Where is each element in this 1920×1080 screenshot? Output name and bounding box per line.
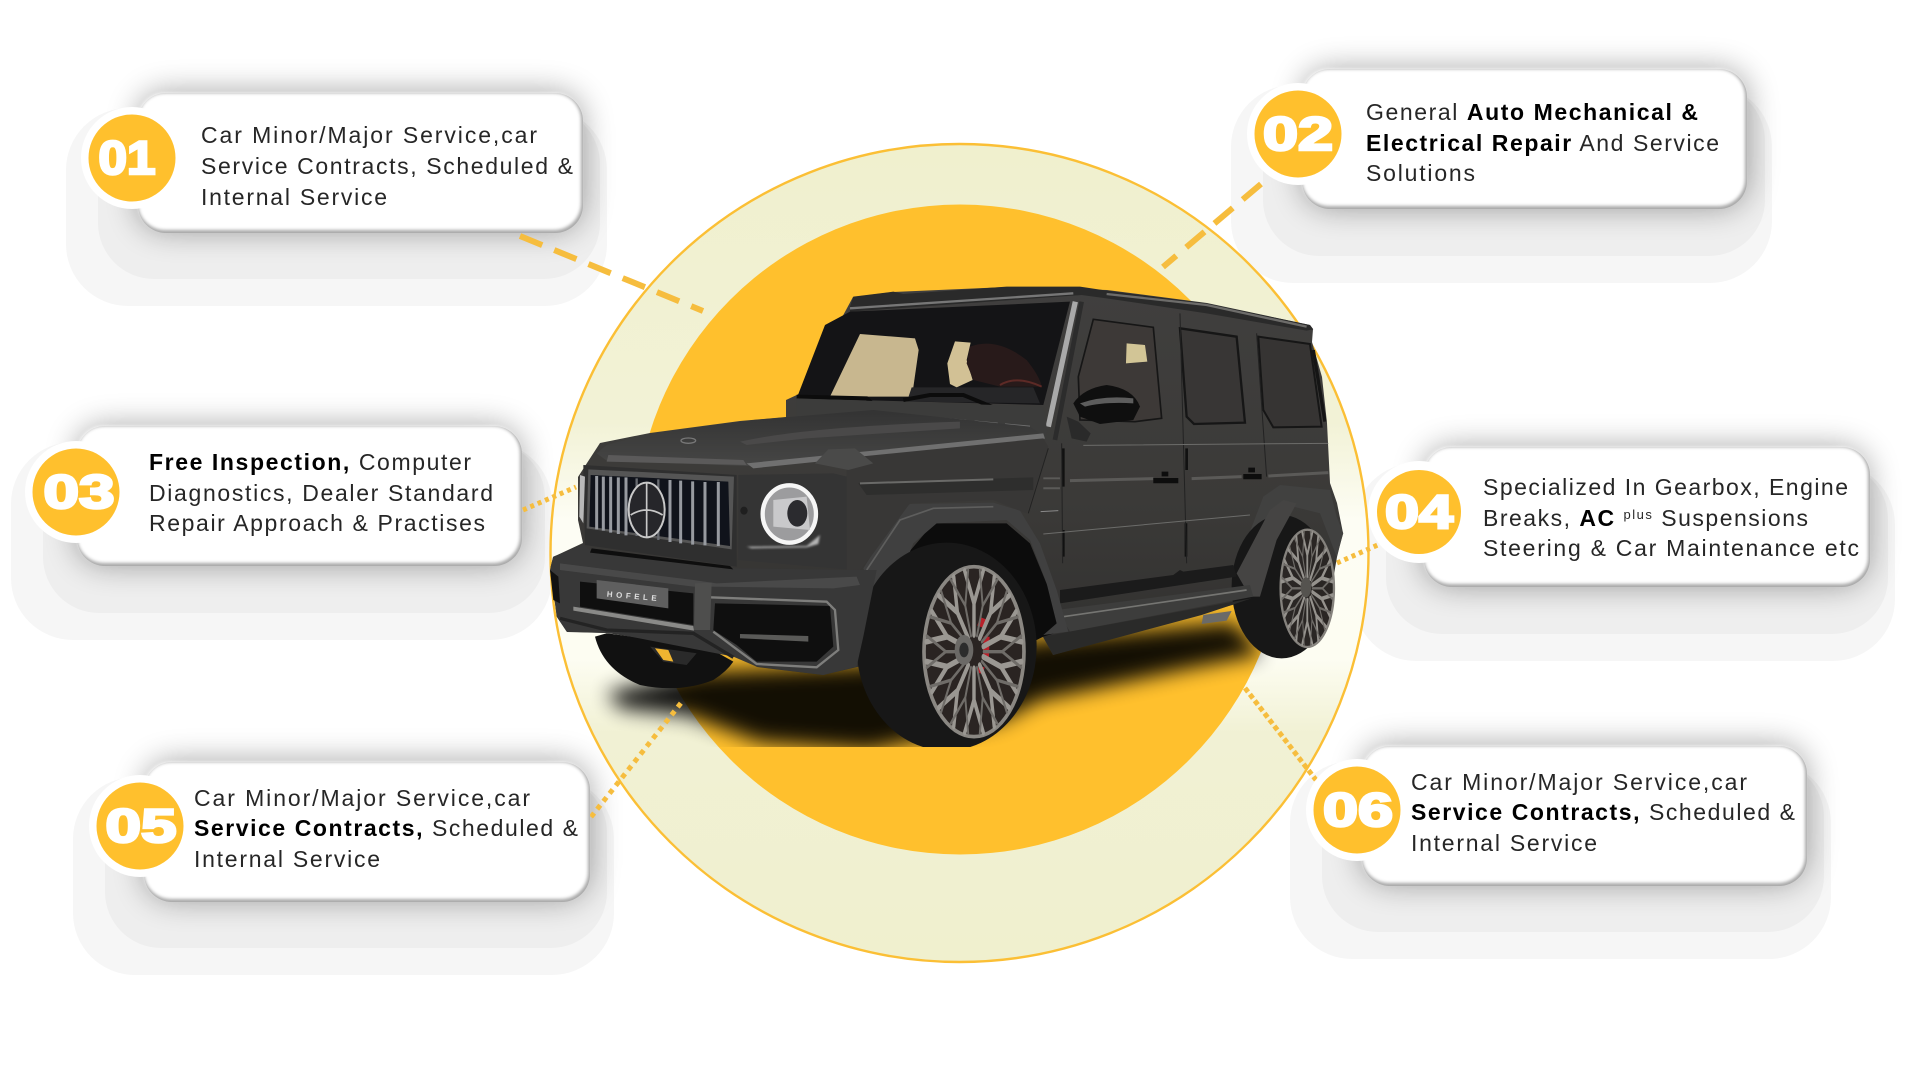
upper body details <box>797 287 1343 570</box>
text 02: General Auto Mechanical & <box>1366 99 1698 125</box>
text 06: Service Contracts, Scheduled & <box>1411 799 1795 825</box>
fender <box>864 438 1044 554</box>
badge 06 <box>1306 759 1408 861</box>
connector 03 <box>523 487 576 510</box>
badge 03: 03 <box>44 465 114 518</box>
text 06: Internal Service <box>1411 830 1597 856</box>
text 03: Free Inspection, Computer <box>149 449 471 475</box>
headlight <box>740 474 846 550</box>
text 01: Internal Service <box>201 184 387 210</box>
front side window <box>1078 319 1162 422</box>
text 04: Suspensions <box>1661 505 1808 531</box>
fender indicator <box>815 448 873 470</box>
left edge light <box>579 475 585 523</box>
roof rail <box>850 287 1313 331</box>
text 03: Diagnostics, Dealer Standard <box>149 480 493 506</box>
licence plate: HOFELE <box>606 590 658 603</box>
card 02 <box>1247 69 1747 209</box>
front wheel well <box>910 523 1056 640</box>
text 02 <box>1366 99 1719 186</box>
card 04 <box>1368 447 1870 587</box>
text 03 <box>149 449 493 536</box>
hood ornament <box>681 438 696 443</box>
connector 06 <box>1245 688 1316 780</box>
text 04: plus <box>1624 507 1652 522</box>
door lines and trim <box>1041 313 1328 563</box>
text 01 <box>201 122 573 210</box>
badge 02: 02 <box>1263 107 1333 160</box>
badge 06: 06 <box>1323 783 1393 836</box>
licence plate <box>597 580 668 608</box>
text 05: Service Contracts, Scheduled & <box>194 815 578 841</box>
connector 04 <box>1337 544 1380 563</box>
A pillar <box>1048 302 1075 427</box>
connector lines <box>520 184 1380 563</box>
bumper <box>550 545 877 675</box>
badge 05 <box>89 775 191 877</box>
connector 02 <box>1163 184 1261 267</box>
rear window <box>1258 337 1322 427</box>
text 05 <box>194 785 578 872</box>
grille <box>587 469 734 549</box>
text 04 <box>1483 474 1859 561</box>
connector 05 <box>591 703 681 817</box>
badge 04: 04 <box>1385 485 1453 538</box>
windshield <box>796 302 1070 405</box>
front arch flare <box>864 503 1068 635</box>
car illustration <box>550 287 1343 754</box>
badge 02 <box>1247 83 1349 185</box>
middle window <box>1180 328 1245 424</box>
door bottom <box>1060 565 1237 603</box>
mirror <box>1067 385 1140 442</box>
face <box>583 465 737 567</box>
text 03: Repair Approach & Practises <box>149 510 485 536</box>
text 04: Specialized In Gearbox, Engine <box>1483 474 1848 500</box>
yellow inner circle <box>635 204 1285 854</box>
text 05: Internal Service <box>194 846 380 872</box>
hood <box>597 410 1043 466</box>
text 04: Breaks, AC <box>1483 505 1614 531</box>
text 05: Car Minor/Major Service,car <box>194 785 530 811</box>
text 06: Car Minor/Major Service,car <box>1411 769 1747 795</box>
badge 04 <box>1368 461 1470 563</box>
body base <box>550 287 1343 675</box>
ground shadow <box>607 622 1262 750</box>
card 05 <box>89 762 590 902</box>
badge 01 <box>81 107 183 209</box>
front details <box>550 410 1048 688</box>
text 02: Solutions <box>1366 160 1475 186</box>
badge 03 <box>25 441 127 543</box>
badge 01: 01 <box>98 131 156 184</box>
card 06 <box>1306 746 1807 886</box>
badge 05: 05 <box>106 799 176 852</box>
front wheel <box>857 543 1037 754</box>
rear arch front edge <box>1237 500 1297 597</box>
rear wheel arch <box>1251 501 1344 556</box>
text 01: Car Minor/Major Service,car <box>201 122 537 148</box>
cowl <box>797 398 1046 426</box>
rear wheel <box>1232 515 1339 659</box>
card 01 <box>81 93 583 233</box>
connector 01 <box>520 236 703 311</box>
text 02: Electrical Repair And Service <box>1366 130 1719 156</box>
lower side details <box>857 500 1339 754</box>
text 06 <box>1411 769 1795 856</box>
text 01: Service Contracts, Scheduled & <box>201 153 573 179</box>
front left wheel <box>595 633 733 688</box>
running board <box>1043 585 1253 655</box>
outer pale ring <box>550 144 1368 962</box>
text 04: Steering & Car Maintenance etc <box>1483 535 1859 561</box>
card 03 <box>25 426 522 566</box>
